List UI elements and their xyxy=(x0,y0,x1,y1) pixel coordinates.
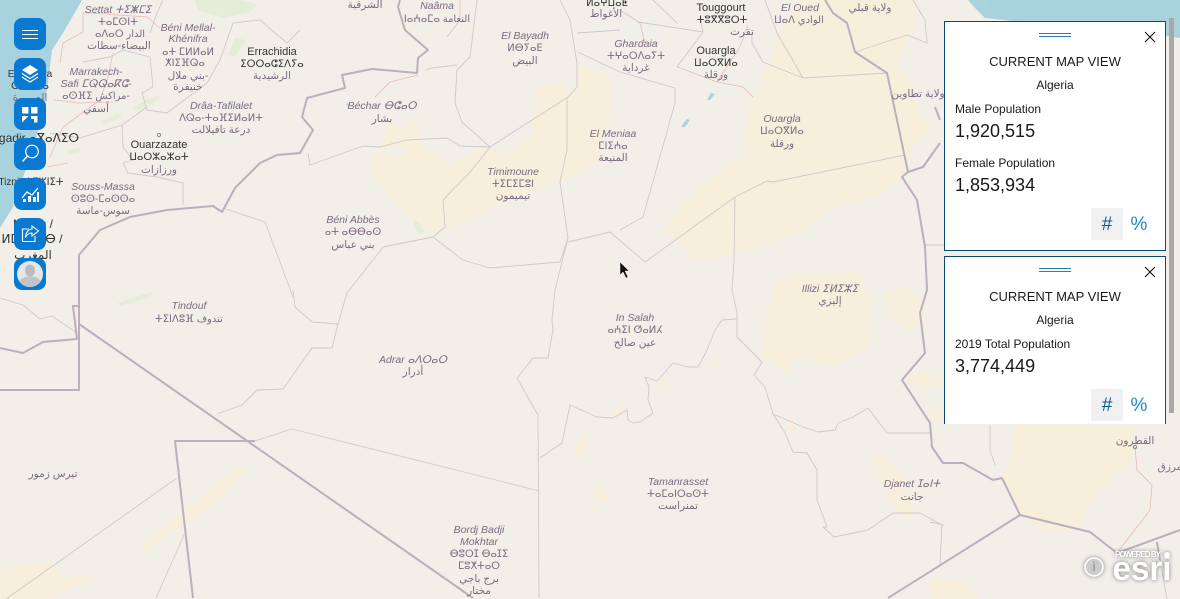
label: settat xyxy=(85,4,153,52)
label: ouargla city xyxy=(694,45,738,81)
label: bechar: بشار xyxy=(371,113,392,125)
sand: illizi erg xyxy=(760,272,872,375)
toggle: number: # xyxy=(1102,395,1112,416)
icon: mouse cursor xyxy=(620,262,629,278)
label: essaouira: ⵚⵡⵉⵔⴰ xyxy=(11,81,49,92)
label: adrar: Adrar ⴰⴷⵔⴰⵔ xyxy=(378,354,448,366)
icon: close xyxy=(1144,266,1156,278)
label: ouargla region: ورقلة xyxy=(770,138,794,150)
label: morocco: ⵍⵎⵖⵔⵉⴱ / xyxy=(1,232,63,246)
toggle: number: # xyxy=(1102,214,1112,235)
label: ouarzazate: ⵡⴰⵔⵣⴰⵣⴰⵜ xyxy=(129,152,189,163)
label: adrar xyxy=(378,354,448,378)
label: el oued xyxy=(774,2,824,26)
label: marrakech-safi: ⴰⵙⴼⵉ مراكش- xyxy=(62,91,130,102)
label: illizi: Illizi ⵉⵍⵉⵣⵉ xyxy=(802,283,860,295)
label: touggourt xyxy=(697,2,754,38)
label: beni mellal: Khénifra xyxy=(168,33,208,45)
label: tindouf: Tindouf xyxy=(172,300,208,312)
esri logo: POWERED BY xyxy=(1115,550,1162,559)
label: morocco: المغرب xyxy=(14,248,52,263)
label: timimoune: Timimoune xyxy=(487,166,539,178)
label: marrakech-safi xyxy=(61,66,132,115)
label: el bayadh xyxy=(501,30,549,67)
panel: total population xyxy=(944,256,1166,424)
sea: mediterranean xyxy=(968,0,1180,38)
label: essaouira xyxy=(8,69,53,104)
label: bechar xyxy=(348,100,417,125)
label: ouarzazate: ورزازات xyxy=(141,164,177,176)
button: search xyxy=(14,138,46,170)
esri logo xyxy=(1085,550,1172,588)
label: in salah xyxy=(607,312,663,349)
sand: djanet xyxy=(870,450,913,520)
label: tindouf xyxy=(155,300,223,325)
toggle: percent: % xyxy=(1131,395,1147,416)
sand: murzuq erg xyxy=(1003,425,1133,530)
label: settat: ⵜⴰⵎⵙⵏⵜ xyxy=(98,17,138,28)
toggle: number xyxy=(1091,208,1123,240)
value: male population: 1,920,515 xyxy=(955,121,1035,141)
sand: timimoune erg xyxy=(370,57,610,233)
label: souss-massa: ⵙⵓⵙ-ⵎⴰⵙⵙⴰ xyxy=(71,194,135,205)
label: beni mellal: خنيفرة xyxy=(173,81,203,93)
label: ghardaia xyxy=(607,38,665,74)
value: female population: 1,853,934 xyxy=(955,175,1035,195)
panel title: CURRENT MAP VIEW xyxy=(989,54,1121,69)
label: in salah: In Salah xyxy=(616,312,654,324)
toggle: number xyxy=(1091,389,1123,421)
sand: bordj erg xyxy=(143,468,250,553)
label: laghouat xyxy=(586,0,628,20)
label: essaouira: الصويرة xyxy=(13,92,47,104)
button: layers xyxy=(14,58,46,90)
label: timimoune: تيميمون xyxy=(496,190,530,202)
label: beni abbes: ⴰⵜ ⴰⴱⴱⴰⵙ xyxy=(325,227,381,238)
label: male population: Male Population xyxy=(955,102,1041,116)
label: kebili: ولاية قبلي xyxy=(849,2,891,14)
label: beni abbes xyxy=(325,214,381,251)
label: bordj badji mokhtar: مختار xyxy=(466,585,491,597)
sea: atlantic xyxy=(0,0,82,228)
label: bordj badji mokhtar: ⴱⵓⵔⵊ ⴱⴰⵊⵉ xyxy=(450,549,508,560)
label: bordj badji mokhtar: ⵎⵓⵅⵜⴰⵔ xyxy=(458,561,500,572)
label: tindouf: ⵜⵉⵏⴷⵓⴼ تندوف xyxy=(155,314,223,325)
label: beni mellal: بني ملال- xyxy=(168,70,209,82)
lakes xyxy=(346,0,990,127)
label: errachidia: ⵉⵔⵔⴰⵛⵉⴷⵢⴰ xyxy=(240,59,304,70)
label: ghardaia: غرداية xyxy=(622,62,650,74)
label: marrakech-safi: Marrakech- xyxy=(69,66,123,78)
label: ouargla city: ورقلة xyxy=(704,69,728,81)
label: essaouira: Essaouira xyxy=(8,69,53,80)
label: morocco xyxy=(1,217,63,263)
label: errachidia xyxy=(240,46,304,82)
label: ghardaia: Ghardaia xyxy=(614,38,658,50)
label: errachidia: الرشيدية xyxy=(253,70,291,82)
drag handle xyxy=(1039,268,1071,272)
sand: southwest xyxy=(0,562,100,599)
label: el meniaa: ⵎⵏⵉⵄⴰ xyxy=(598,141,628,152)
label: bordj badji mokhtar: Mokhtar xyxy=(460,536,498,548)
label: bordj badji mokhtar xyxy=(450,524,508,597)
label: tiznit: Tiznit ⵜⵉⵣⵏⵉⵜ xyxy=(0,177,64,188)
label: ouargla city: ⵡⴰⵔⴳⵍⴰ xyxy=(694,58,738,69)
label: naama: ⵏⴰⵄⴰⵎⴰ النعامة xyxy=(404,14,470,25)
label: draa-tafilalet: ⴷⵕⴰ-ⵜⴰⴼⵉⵍⴰⵍⵜ xyxy=(179,113,263,124)
label: ouarzazate xyxy=(129,133,189,176)
label: touggourt: تقرت xyxy=(730,26,754,38)
label: djanet: Djanet ⵊⴰⵏⵜ xyxy=(884,478,941,490)
label: draa-tafilalet: درعة تافيلالت xyxy=(192,124,251,136)
label: female population: Female Population xyxy=(955,156,1055,170)
label: bordj badji mokhtar: برج باجي xyxy=(459,573,499,585)
label: naama xyxy=(404,0,470,25)
button: share xyxy=(14,218,46,250)
drag handle xyxy=(1039,33,1071,37)
label: el meniaa: El Meniaa xyxy=(590,128,636,140)
label: beni mellal: Béni Mellal- xyxy=(161,22,216,34)
label: el oued: ⵡⴰⴷ الوادي xyxy=(774,15,824,26)
label: errachidia: Errachidia xyxy=(247,46,298,58)
sand: small patches xyxy=(572,360,980,599)
label: in salah: ⴰⵄⵉⵏ ⵚⴰⵍⵃ xyxy=(607,325,663,336)
label: adrar: أدرار xyxy=(402,364,423,378)
label: beni abbes: Béni Abbès xyxy=(326,214,380,226)
label: naama: Naâma xyxy=(420,0,454,12)
label: el meniaa xyxy=(590,128,636,164)
label: al qatrun: القطرون xyxy=(1116,435,1154,447)
label: timimoune xyxy=(487,166,539,202)
button: profile xyxy=(14,258,46,290)
label: ghardaia: ⵜⵖⴰⵔⴷⴰⵢⵜ xyxy=(607,51,665,62)
label: el oued: El Oued xyxy=(781,2,820,14)
button: chart xyxy=(14,178,46,210)
label: ouargla region xyxy=(760,113,804,150)
label: tamanrasset: ⵜⴰⵎⴰⵏⵔⴰⵙⵜ xyxy=(647,489,709,500)
label: ouargla region: ⵡⴰⵔⴳⵍⴰ xyxy=(760,126,804,137)
label: souss-massa: Souss-Massa xyxy=(71,181,135,193)
scrollbar xyxy=(1169,18,1174,413)
label: marrakech-safi: أسفي xyxy=(83,101,109,115)
label: in salah: عين صالح xyxy=(614,337,656,349)
label: morocco: Maroc / xyxy=(13,217,54,231)
button: apps xyxy=(14,98,46,130)
label: ouargla city: Ouargla xyxy=(696,45,736,57)
label: ouarzazate: Ouarzazate xyxy=(131,139,187,151)
label: illizi: إليزي xyxy=(818,295,842,307)
label: timimoune: ⵜⵉⵎⵉⵎⵓⵏ xyxy=(492,179,534,190)
label: settat: البيضاء-سطات xyxy=(87,40,151,52)
button: menu xyxy=(14,18,46,50)
panel subtitle: Algeria xyxy=(1036,313,1074,327)
label: bordj badji mokhtar: Bordj Badji xyxy=(454,524,505,536)
label: tamanrasset: Tamanrasset xyxy=(648,476,709,488)
label: tiris zemmour: تيرس زمور xyxy=(28,468,77,480)
sand: ouargla erg xyxy=(660,0,933,260)
label: souss-massa xyxy=(71,181,135,217)
label: marrakech-safi: Safi ⵎⵕⵕⴰⴽⵛ- xyxy=(61,78,132,90)
label: tataouine: ولاية تطاوين xyxy=(891,88,945,100)
label: el bayadh: البيض xyxy=(512,55,538,67)
label: djanet xyxy=(884,478,941,503)
label: laghouat: الأغواط xyxy=(590,7,622,20)
value: total population: 3,774,449 xyxy=(955,356,1035,376)
label: ouargla region: Ouargla xyxy=(763,113,801,125)
label: touggourt: Touggourt xyxy=(697,2,745,14)
label: el bayadh: El Bayadh xyxy=(501,30,549,42)
label: beni mellal: ⵅⵏⵉⴼⵕⴰ xyxy=(165,58,205,69)
label: touggourt: ⵜⵓⴳⴳⵓⵔⵜ xyxy=(697,15,748,26)
label: draa-tafilalet: Drâa-Tafilalet xyxy=(190,100,253,112)
label: beni abbes: بني عباس xyxy=(331,239,375,251)
panel title: CURRENT MAP VIEW xyxy=(989,289,1121,304)
label: draa-tafilalet xyxy=(179,100,263,136)
label: beni mellal xyxy=(161,22,216,93)
vegetation xyxy=(68,0,425,306)
label: settat: Settat ⵜⵉⵥⵎⵉ xyxy=(85,4,153,16)
panel subtitle: Algeria xyxy=(1036,78,1074,92)
label: el bayadh: ⵍⴱⵢⴰⴹ xyxy=(507,43,543,54)
label: djanet: جانت xyxy=(901,491,923,503)
label: tamanrasset xyxy=(647,476,709,512)
label: souss-massa: سوس-ماسة xyxy=(76,205,130,217)
label: settat: ⴰⴷⴰⵔ الدار xyxy=(95,29,145,40)
toggle: percent: % xyxy=(1131,214,1147,235)
label: illizi xyxy=(802,283,860,307)
label: el meniaa: المنيعة xyxy=(598,152,628,164)
panel: gender population xyxy=(944,21,1166,251)
label: bechar: Béchar ⴱⵛⴰⵔ xyxy=(348,100,417,112)
label: total population: 2019 Total Population xyxy=(955,337,1070,351)
icon: close xyxy=(1144,32,1156,42)
esri logo: esri xyxy=(1112,550,1172,588)
label: beni mellal: ⴰⵜ ⵎⵍⵍⴰⵍ xyxy=(162,47,214,58)
label: tamanrasset: تمنراست xyxy=(658,500,698,512)
